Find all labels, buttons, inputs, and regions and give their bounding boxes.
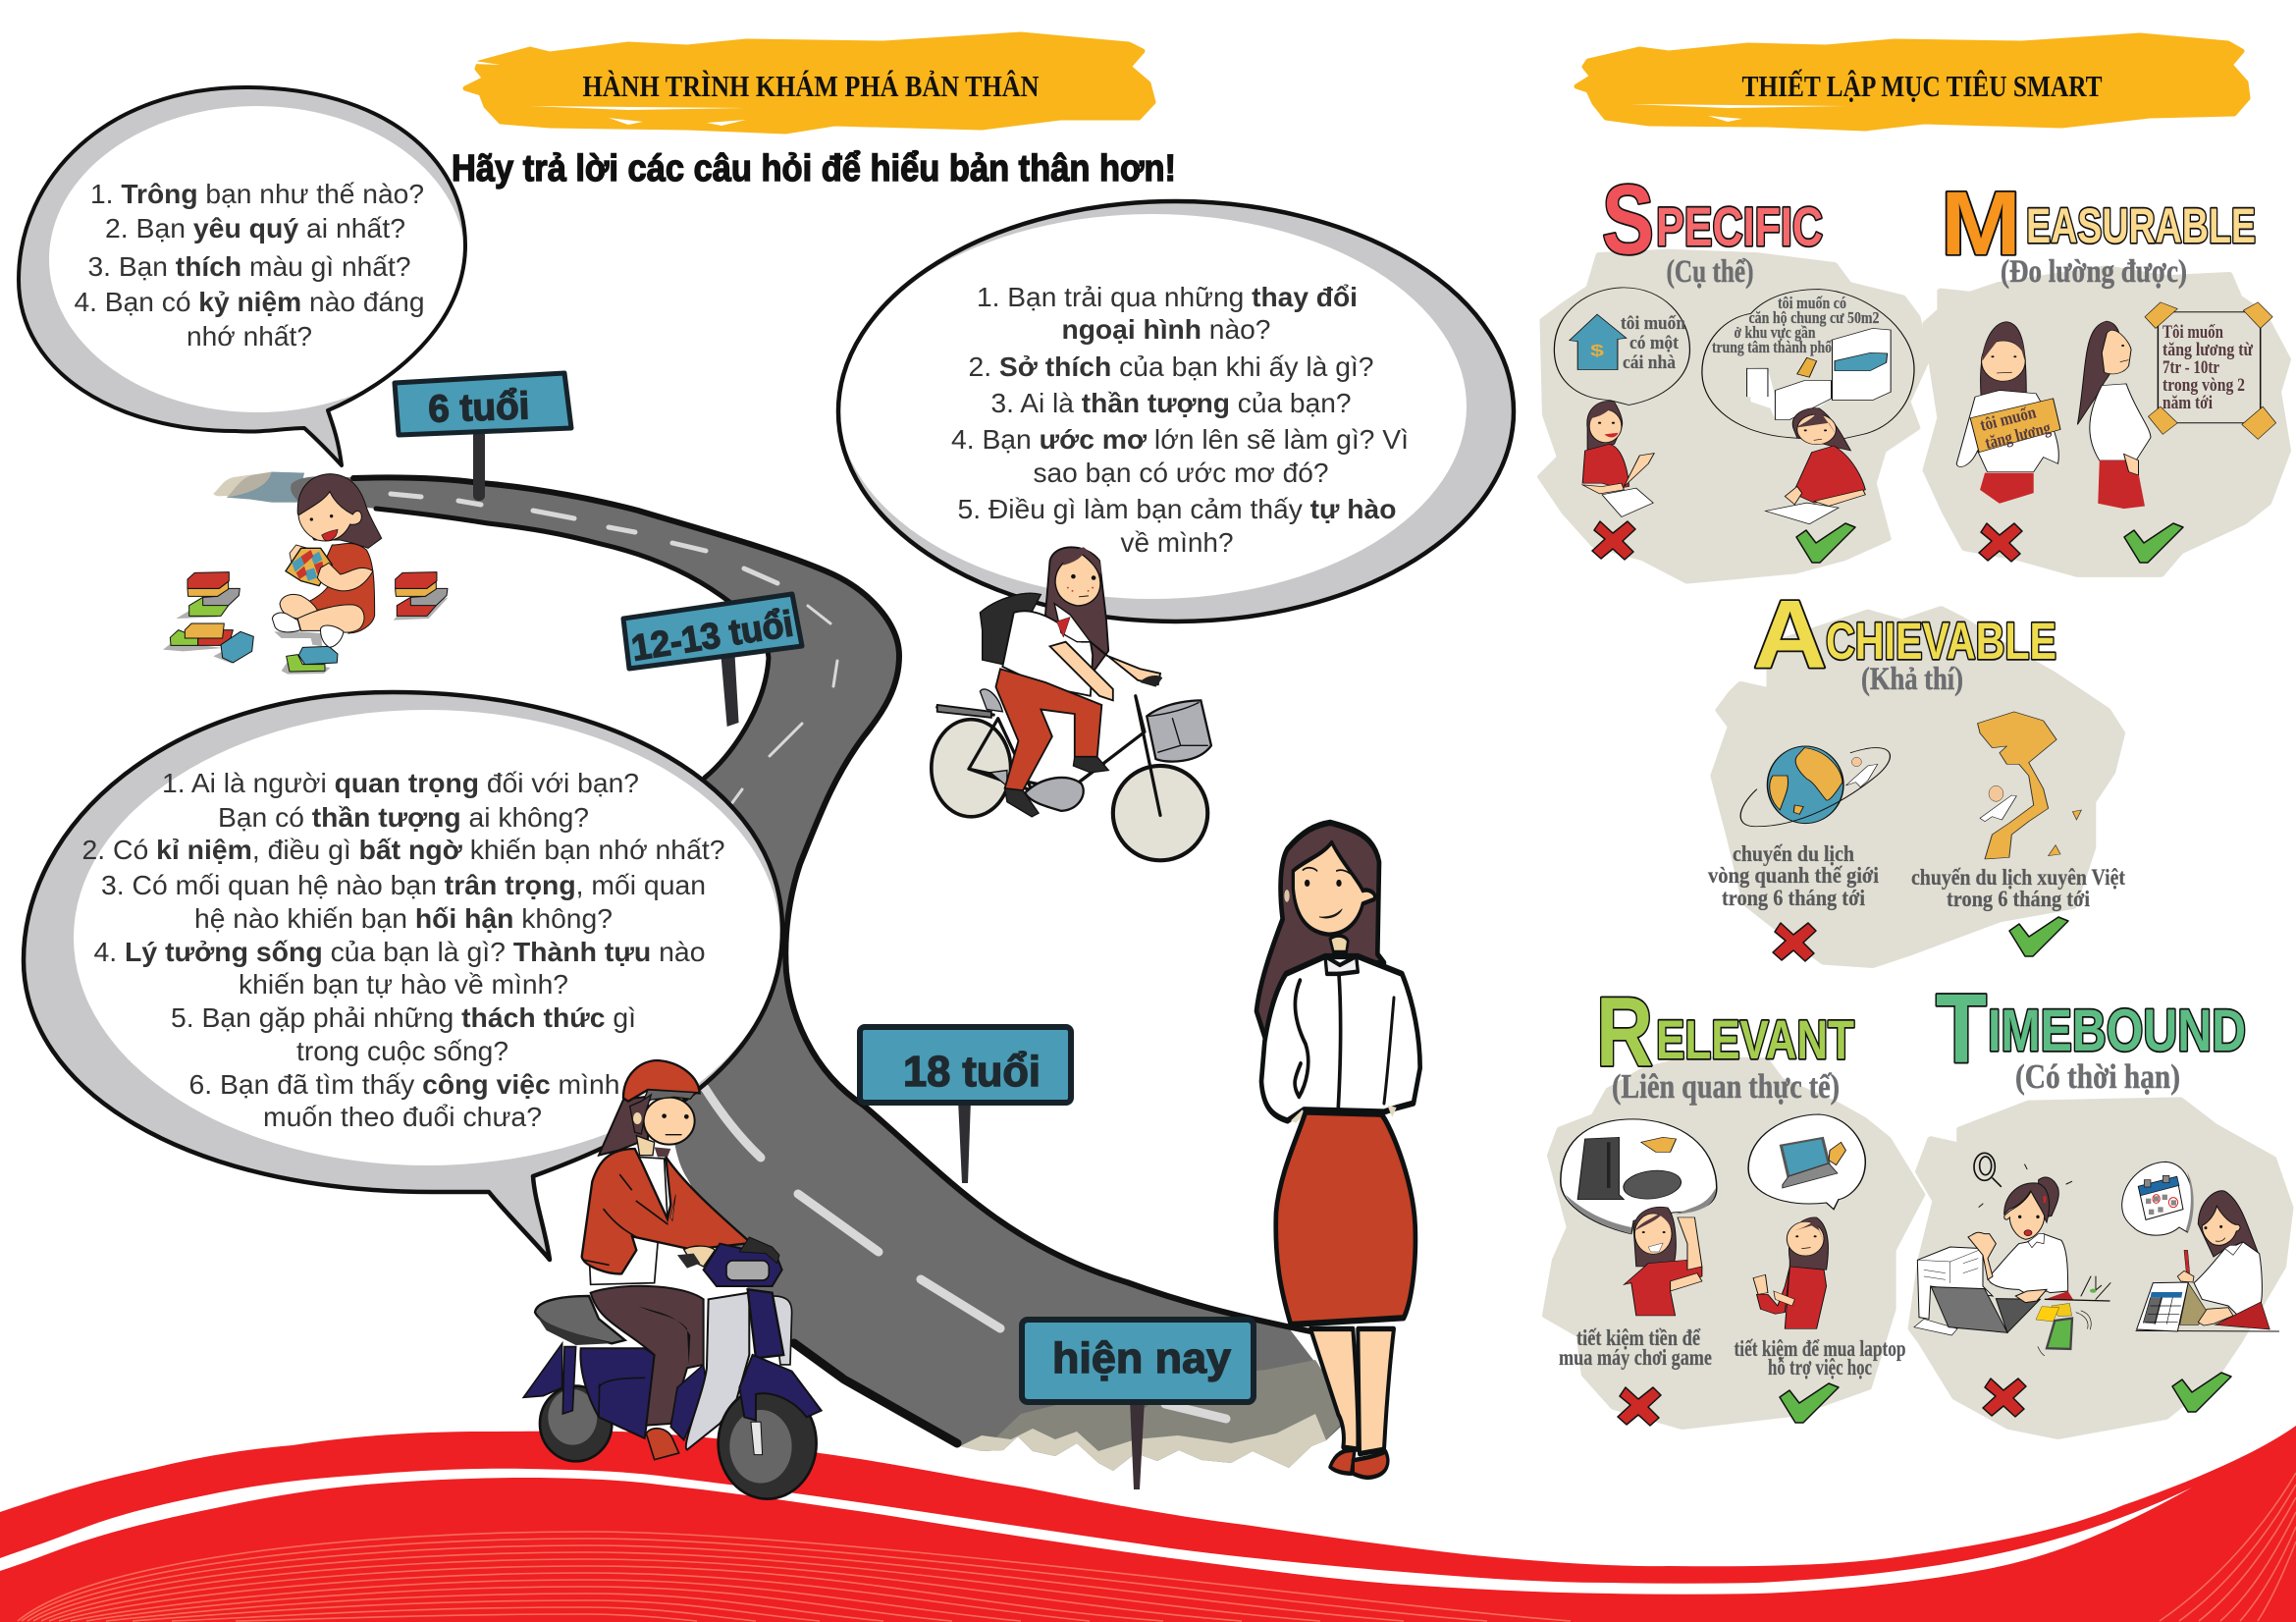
- questions for 18 years old: 2. Có kỉ niệm, điều gì bất ngờ khiến bạn nhớ nhất?: [82, 835, 724, 865]
- caption: Vietnam trip: trong 6 tháng tới: [1947, 887, 2091, 911]
- caption: world trip: trong 6 tháng tới: [1722, 886, 1866, 910]
- poster text: trong vòng 2: [2163, 375, 2245, 396]
- road: [213, 472, 1355, 1471]
- thought text: vague: [1621, 313, 1685, 373]
- caption: laptop: [1734, 1336, 1906, 1379]
- icon: cross: [1979, 523, 2022, 562]
- red wave footer: [0, 1426, 2296, 1622]
- sign: 6 tuổi: [395, 373, 571, 501]
- questions for 18 years old: 6. Bạn đã tìm thấy công việc mình: [188, 1069, 620, 1100]
- caption: Vietnam trip: chuyến du lịch xuyên Việt: [1911, 865, 2125, 890]
- sign text: tôi muốn: [1978, 402, 2038, 435]
- panel: Timebound: [1912, 974, 2290, 1436]
- illustration: Vietnam map and plane: [1978, 712, 2081, 859]
- caption: world trip: chuyến du lịch: [1733, 841, 1854, 866]
- heading: Relevant: ELEVANT: [1656, 1008, 1854, 1070]
- yellow title banner: SMART: [1576, 35, 2248, 129]
- questions for 18 years old: khiến bạn tự hào về mình?: [239, 969, 568, 1000]
- illustration: specific apartment wish: [1702, 290, 1914, 524]
- sign: 12-13 tuổi: 12-13 tuổi: [628, 603, 796, 669]
- panel: Relevant: [1546, 977, 1921, 1427]
- questions for 18 years old: [82, 768, 724, 1132]
- thought text: vague: có một: [1629, 333, 1680, 353]
- speech bubble: 6 years old: [19, 87, 465, 465]
- yellow title banner: journey: [461, 34, 1153, 132]
- heading: Specific: [1602, 165, 1823, 275]
- illustration: laptop wish: [1748, 1114, 1865, 1328]
- sign text: tăng lương: [1983, 417, 2053, 453]
- caption: laptop: hỗ trợ việc học: [1768, 1355, 1872, 1379]
- caption: Khả thí: (Khả thí): [1861, 662, 1963, 697]
- questions for 18 years old: muốn theo đuổi chưa?: [263, 1102, 542, 1132]
- caption: world trip: vòng quanh thế giới: [1708, 863, 1880, 888]
- thought text: specific: trung tâm thành phố: [1712, 338, 1832, 356]
- questions for 6 years old: 2. Bạn yêu quý ai nhất?: [105, 213, 405, 243]
- questions for 18 years old: trong cuộc sống?: [296, 1036, 508, 1066]
- sign: hiện nay: hiện nay: [1052, 1334, 1232, 1382]
- thought text: vague: tôi muốn: [1621, 313, 1685, 334]
- icon: cross: [1983, 1379, 2026, 1417]
- heading: Specific: PECIFIC: [1656, 195, 1823, 257]
- icon: check: [2172, 1373, 2231, 1412]
- heading: Achievable: CHIEVABLE: [1826, 613, 2056, 671]
- sign: 18 tuổi: [860, 1027, 1071, 1183]
- icon: cross: [1592, 521, 1635, 560]
- questions for 6 years old: [75, 179, 424, 351]
- heading: Timebound: T: [1936, 974, 1987, 1084]
- illustration: vague house wish: [1554, 288, 1689, 516]
- questions for 6 years old: 4. Bạn có kỷ niệm nào đáng: [75, 287, 424, 317]
- thought text: specific: ở khu vực gần: [1734, 323, 1816, 342]
- thought text: specific: tôi muốn có: [1778, 294, 1846, 312]
- caption: Liên quan thực tế: (Liên quan thực tế): [1612, 1067, 1840, 1106]
- questions for 18 years old: 4. Lý tưởng sống của bạn là gì? Thành tựu nào: [94, 937, 705, 967]
- speech bubble: 18 years old: [24, 692, 782, 1260]
- sign: 6 tuổi: 6 tuổi: [428, 385, 530, 431]
- subtitle: Hãy trả lời các câu hỏi để hiểu bản thân hơn!: [452, 148, 1176, 189]
- caption: laptop: tiết kiệm để mua laptop: [1734, 1336, 1906, 1361]
- figure: grown woman standing: [1256, 823, 1420, 1478]
- questions for 18 years old: hệ nào khiến bạn hối hận không?: [194, 903, 613, 934]
- panel: Achievable: [1708, 580, 2125, 965]
- speech bubble: 12-13 years old: [838, 201, 1514, 622]
- questions for 12-13 years old: ngoại hình nào?: [1062, 314, 1270, 345]
- illustration: vague house wish: $: [1590, 342, 1604, 360]
- questions for 12-13 years old: về mình?: [1121, 527, 1233, 558]
- heading: Achievable: A: [1753, 580, 1827, 688]
- caption: world trip: [1708, 841, 1880, 910]
- sign: 12-13 tuổi: [623, 594, 802, 725]
- figure: schoolgirl on bicycle: [932, 547, 1211, 860]
- poster text: Tôi muốn: [2163, 322, 2223, 343]
- heading: Specific: S: [1602, 165, 1654, 275]
- sign: 18 tuổi: 18 tuổi: [903, 1048, 1041, 1096]
- questions for 12-13 years old: 3. Ai là thần tượng của bạn?: [991, 388, 1351, 418]
- questions for 12-13 years old: 1. Bạn trải qua những thay đổi: [977, 282, 1358, 312]
- questions for 18 years old: 5. Bạn gặp phải những thách thức gì: [171, 1002, 636, 1033]
- thought text: vague: cái nhà: [1623, 352, 1676, 373]
- illustration: globe and plane: [1740, 746, 1890, 827]
- title: SMART goals: THIẾT LẬP MỤC TIÊU SMART: [1741, 68, 2103, 103]
- panel: Specific: [1541, 165, 1926, 581]
- caption: Cụ thể: (Cụ thể): [1667, 254, 1753, 290]
- figure: child playing with blocks: [163, 474, 449, 675]
- questions for 12-13 years old: [951, 282, 1409, 558]
- poster text: 7tr - 10tr: [2163, 357, 2219, 378]
- questions for 6 years old: 3. Bạn thích màu gì nhất?: [88, 251, 411, 282]
- questions for 18 years old: 3. Có mối quan hệ nào bạn trân trọng, mối quan: [101, 870, 706, 900]
- poster text: [2163, 322, 2253, 413]
- icon: cross: [1773, 923, 1816, 961]
- thought text: specific: căn hộ chung cư 50m2: [1749, 308, 1879, 327]
- illustration: measurable raise: [2077, 302, 2276, 509]
- icon: check: [2009, 917, 2068, 956]
- questions for 18 years old: Bạn có thần tượng ai không?: [218, 802, 589, 833]
- heading: Measurable: M: [1941, 174, 2021, 274]
- caption: Vietnam trip: [1911, 865, 2125, 911]
- heading: Relevant: [1596, 977, 1854, 1087]
- panel: Measurable: [1926, 174, 2287, 574]
- sign: hiện nay: [1022, 1320, 1254, 1489]
- title: journey of self discovery: HÀNH TRÌNH KHÁM PHÁ BẢN THÂN: [583, 69, 1039, 103]
- illustration: vague raise: [1956, 322, 2060, 504]
- icon: cross: [1618, 1387, 1661, 1426]
- icon: check: [2124, 523, 2183, 563]
- caption: game console: [1559, 1325, 1712, 1370]
- heading: Achievable: [1753, 580, 2056, 688]
- caption: game console: mua máy chơi game: [1559, 1345, 1712, 1370]
- heading: Relevant: R: [1596, 977, 1653, 1087]
- questions for 12-13 years old: sao bạn có ước mơ đó?: [1033, 458, 1329, 488]
- thought text: specific: [1712, 294, 1879, 356]
- poster text: năm tới: [2163, 393, 2213, 413]
- icon: check: [1796, 523, 1855, 563]
- icon: check: [1780, 1383, 1839, 1423]
- illustration: woman planning with calendar: [2122, 1162, 2279, 1331]
- illustration: game console wish: [1561, 1119, 1717, 1316]
- heading: Measurable: [1941, 174, 2256, 274]
- caption: game console: tiết kiệm tiền để: [1576, 1325, 1701, 1350]
- questions for 12-13 years old: 5. Điều gì làm bạn cảm thấy tự hào: [958, 494, 1396, 524]
- questions for 12-13 years old: 4. Bạn ước mơ lớn lên sẽ làm gì? Vì: [951, 424, 1409, 455]
- illustration: stressed woman at laptop: [1914, 1153, 2110, 1356]
- figure: woman on motorbike: [523, 1060, 822, 1499]
- questions for 18 years old: 1. Ai là người quan trọng đối với bạn?: [162, 768, 639, 798]
- questions for 12-13 years old: 2. Sở thích của bạn khi ấy là gì?: [968, 351, 1374, 382]
- caption: Đo lường được: (Đo lường được): [2001, 254, 2187, 290]
- sign text: [1978, 402, 2053, 453]
- poster text: tăng lương từ: [2163, 340, 2253, 360]
- caption: Có thời hạn: (Có thời hạn): [2015, 1057, 2180, 1096]
- questions for 6 years old: nhớ nhất?: [187, 321, 312, 351]
- heading: Timebound: [1936, 974, 2246, 1084]
- questions for 6 years old: 1. Trông bạn như thế nào?: [90, 179, 424, 209]
